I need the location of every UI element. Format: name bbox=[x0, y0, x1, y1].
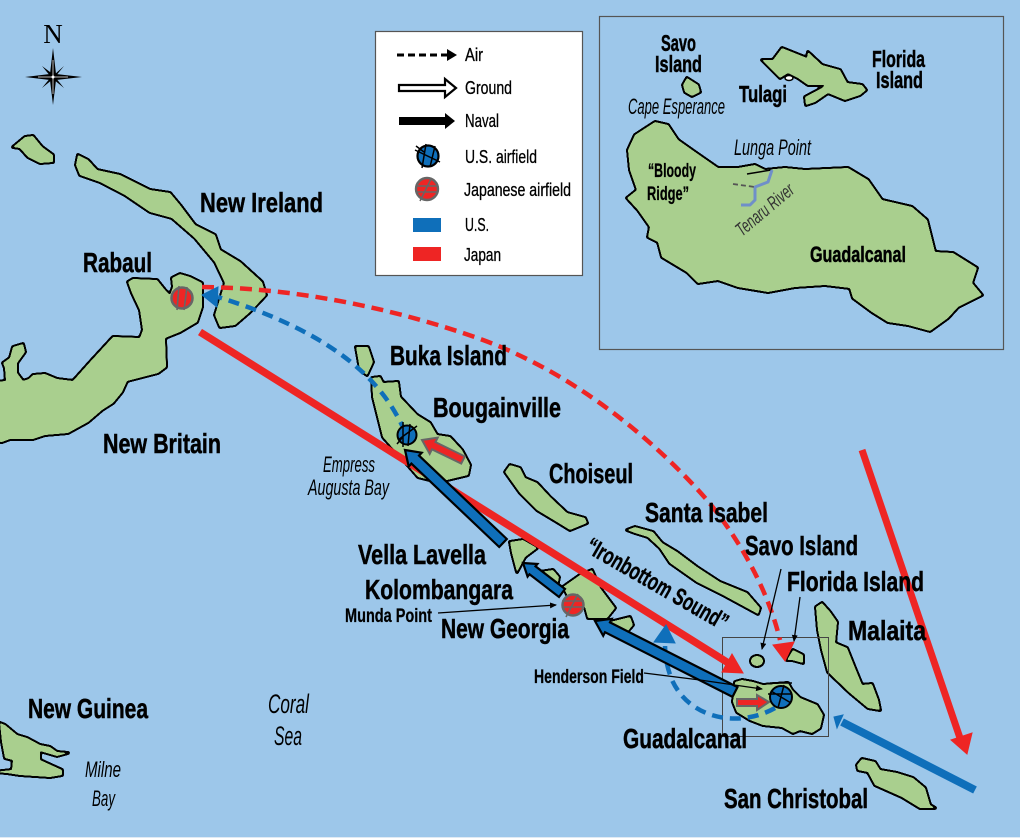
legend: U.S. airfield icon bbox=[415, 144, 440, 168]
label: New Guinea: New Guinea bbox=[28, 693, 148, 724]
arrow: U.S. naval advance to Bougainville bbox=[405, 450, 507, 547]
label: Malaita: Malaita bbox=[848, 615, 926, 646]
legend: ground text: Ground bbox=[465, 78, 512, 98]
legend: air text: Air bbox=[465, 45, 483, 65]
label: Kolombangara: Kolombangara bbox=[365, 574, 513, 605]
label: Rabaul: Rabaul bbox=[83, 247, 152, 278]
legend: Japan text: Japan bbox=[464, 245, 501, 265]
compass star bbox=[25, 48, 82, 105]
label: Augusta Bay: Augusta Bay bbox=[307, 475, 390, 500]
panel: Guadalcanal inset map bbox=[600, 16, 1004, 350]
inset label: Guadalcanal: Guadalcanal bbox=[810, 242, 906, 267]
label: Henderson Field: Henderson Field bbox=[534, 667, 644, 688]
island: New Britain bbox=[0, 274, 202, 442]
inset label: Island: Island bbox=[655, 51, 702, 77]
island: Kolombangara bbox=[540, 570, 559, 587]
island: Vella Lavella bbox=[510, 540, 537, 572]
leader line: Savo Island bbox=[762, 569, 781, 649]
north letter: N bbox=[43, 19, 63, 49]
Bloody Ridge trail bbox=[733, 184, 755, 187]
leader line: Florida Island bbox=[794, 597, 800, 641]
label: Coral: Coral bbox=[268, 689, 310, 719]
label: San Christobal: San Christobal bbox=[724, 783, 868, 814]
inset label: Bloody: “Bloody bbox=[648, 161, 696, 182]
Tenaru River bbox=[741, 170, 772, 205]
label: Milne: Milne bbox=[85, 757, 121, 782]
label: Bougainville: Bougainville bbox=[433, 392, 561, 423]
label: Sea: Sea bbox=[274, 721, 302, 751]
inset label: Florida: Florida bbox=[872, 46, 925, 72]
legend: Japanese airfield icon bbox=[416, 178, 438, 201]
legend: U.S. swatch bbox=[413, 218, 441, 232]
label: New Ireland: New Ireland bbox=[200, 187, 323, 218]
island: Santa Isabel bbox=[627, 527, 760, 614]
islands of the main map bbox=[0, 136, 935, 808]
legend: naval text: Naval bbox=[465, 111, 499, 131]
inset island: Savo bbox=[683, 78, 700, 96]
island: Choiseul bbox=[505, 465, 587, 530]
label: New Britain: New Britain bbox=[103, 428, 221, 459]
arrow: U.S. air route to Rabaul bbox=[202, 287, 405, 432]
island: small island south of New Georgia bbox=[610, 617, 633, 632]
island: New Guinea tip bbox=[0, 723, 68, 777]
arrow: Japanese naval movement in the east bbox=[862, 450, 972, 754]
icon: Japanese airfield at Rabaul bbox=[172, 286, 192, 310]
inset label: Savo: Savo bbox=[661, 30, 696, 56]
arrow: Japanese naval advance to Guadalcanal bbox=[200, 332, 743, 673]
inset islands bbox=[627, 48, 982, 331]
Lunga Point line bbox=[747, 170, 771, 174]
leader line: Henderson Field bbox=[644, 673, 762, 689]
legend box bbox=[376, 32, 582, 276]
inset coastline outlines bbox=[627, 48, 982, 331]
label: Guadalcanal: Guadalcanal bbox=[623, 723, 747, 754]
label: Munda Point: Munda Point bbox=[345, 606, 433, 627]
inset frame bbox=[600, 16, 1004, 350]
inset locator box bbox=[722, 638, 828, 736]
arrow: Japanese ground movement on Bougainville bbox=[422, 438, 465, 464]
island: small northwest island bbox=[13, 136, 53, 163]
inset island: Tulagi bbox=[785, 76, 793, 80]
label: New Georgia: New Georgia bbox=[441, 613, 569, 644]
label: Empress: Empress bbox=[323, 452, 375, 477]
inset label: Lunga Point: Lunga Point bbox=[734, 135, 812, 160]
legend: U.S. airfield text: U.S. airfield bbox=[465, 147, 537, 167]
island: Guadalcanal bbox=[733, 680, 823, 733]
island: Buka bbox=[356, 347, 373, 375]
island: Savo bbox=[751, 656, 763, 666]
label: Choiseul: Choiseul bbox=[549, 458, 633, 489]
coastline outlines of the main map bbox=[0, 136, 935, 808]
legend: naval arrow bbox=[399, 113, 455, 129]
panel: legend bbox=[376, 32, 582, 276]
legend: U.S. text: U.S. bbox=[465, 215, 489, 235]
icon: Japanese airfield at Munda Point bbox=[562, 594, 584, 617]
legend: air arrow bbox=[397, 49, 457, 61]
label: Florida Island: Florida Island bbox=[787, 566, 924, 597]
island: Malaita bbox=[816, 603, 880, 710]
island: New Ireland bbox=[76, 155, 266, 327]
island: New Georgia bbox=[563, 570, 615, 618]
inset label: Ridge: Ridge” bbox=[647, 184, 689, 205]
leader line: Munda Point bbox=[438, 605, 556, 613]
inset label: Tenaru River: Tenaru River bbox=[732, 179, 799, 241]
label: Santa Isabel: Santa Isabel bbox=[645, 497, 768, 528]
icon: U.S. airfield on Bougainville bbox=[397, 422, 417, 447]
inset label: Island: Island bbox=[876, 67, 923, 93]
inset island: Guadalcanal bbox=[627, 122, 982, 331]
label: Vella Lavella: Vella Lavella bbox=[358, 539, 486, 570]
island: Florida bbox=[787, 650, 803, 663]
island: San Christobal bbox=[857, 759, 935, 808]
label: Savo Island: Savo Island bbox=[745, 530, 858, 561]
arrow: Japanese air route from Rabaul bbox=[202, 287, 794, 661]
inset island: Florida bbox=[762, 48, 866, 105]
inset label: Tulagi: Tulagi bbox=[739, 81, 787, 107]
legend: Japanese airfield text: Japanese airfield bbox=[464, 180, 571, 200]
label: Buka Island: Buka Island bbox=[390, 340, 507, 371]
label: Bay: Bay bbox=[92, 786, 116, 811]
arrow: U.S. naval advance to Vella Lavella bbox=[523, 563, 565, 597]
arrow: U.S. air route around Guadalcanal bbox=[654, 625, 775, 719]
legend: Japan swatch bbox=[413, 247, 441, 261]
island: Bougainville bbox=[372, 377, 470, 480]
compass rose bbox=[25, 19, 82, 105]
arrow: U.S. naval advance from the southeast bbox=[834, 715, 975, 790]
legend: ground arrow bbox=[399, 79, 456, 97]
icon: U.S. airfield on Guadalcanal bbox=[768, 683, 792, 708]
arrow: Japanese ground movement on Guadalcanal bbox=[737, 695, 769, 710]
arrow: U.S. naval advance from Guadalcanal to New Georgia bbox=[595, 619, 738, 697]
inset label: Cape Esperance: Cape Esperance bbox=[628, 94, 725, 119]
label: Ironbottom Sound: “Ironbottom Sound” bbox=[581, 533, 733, 636]
